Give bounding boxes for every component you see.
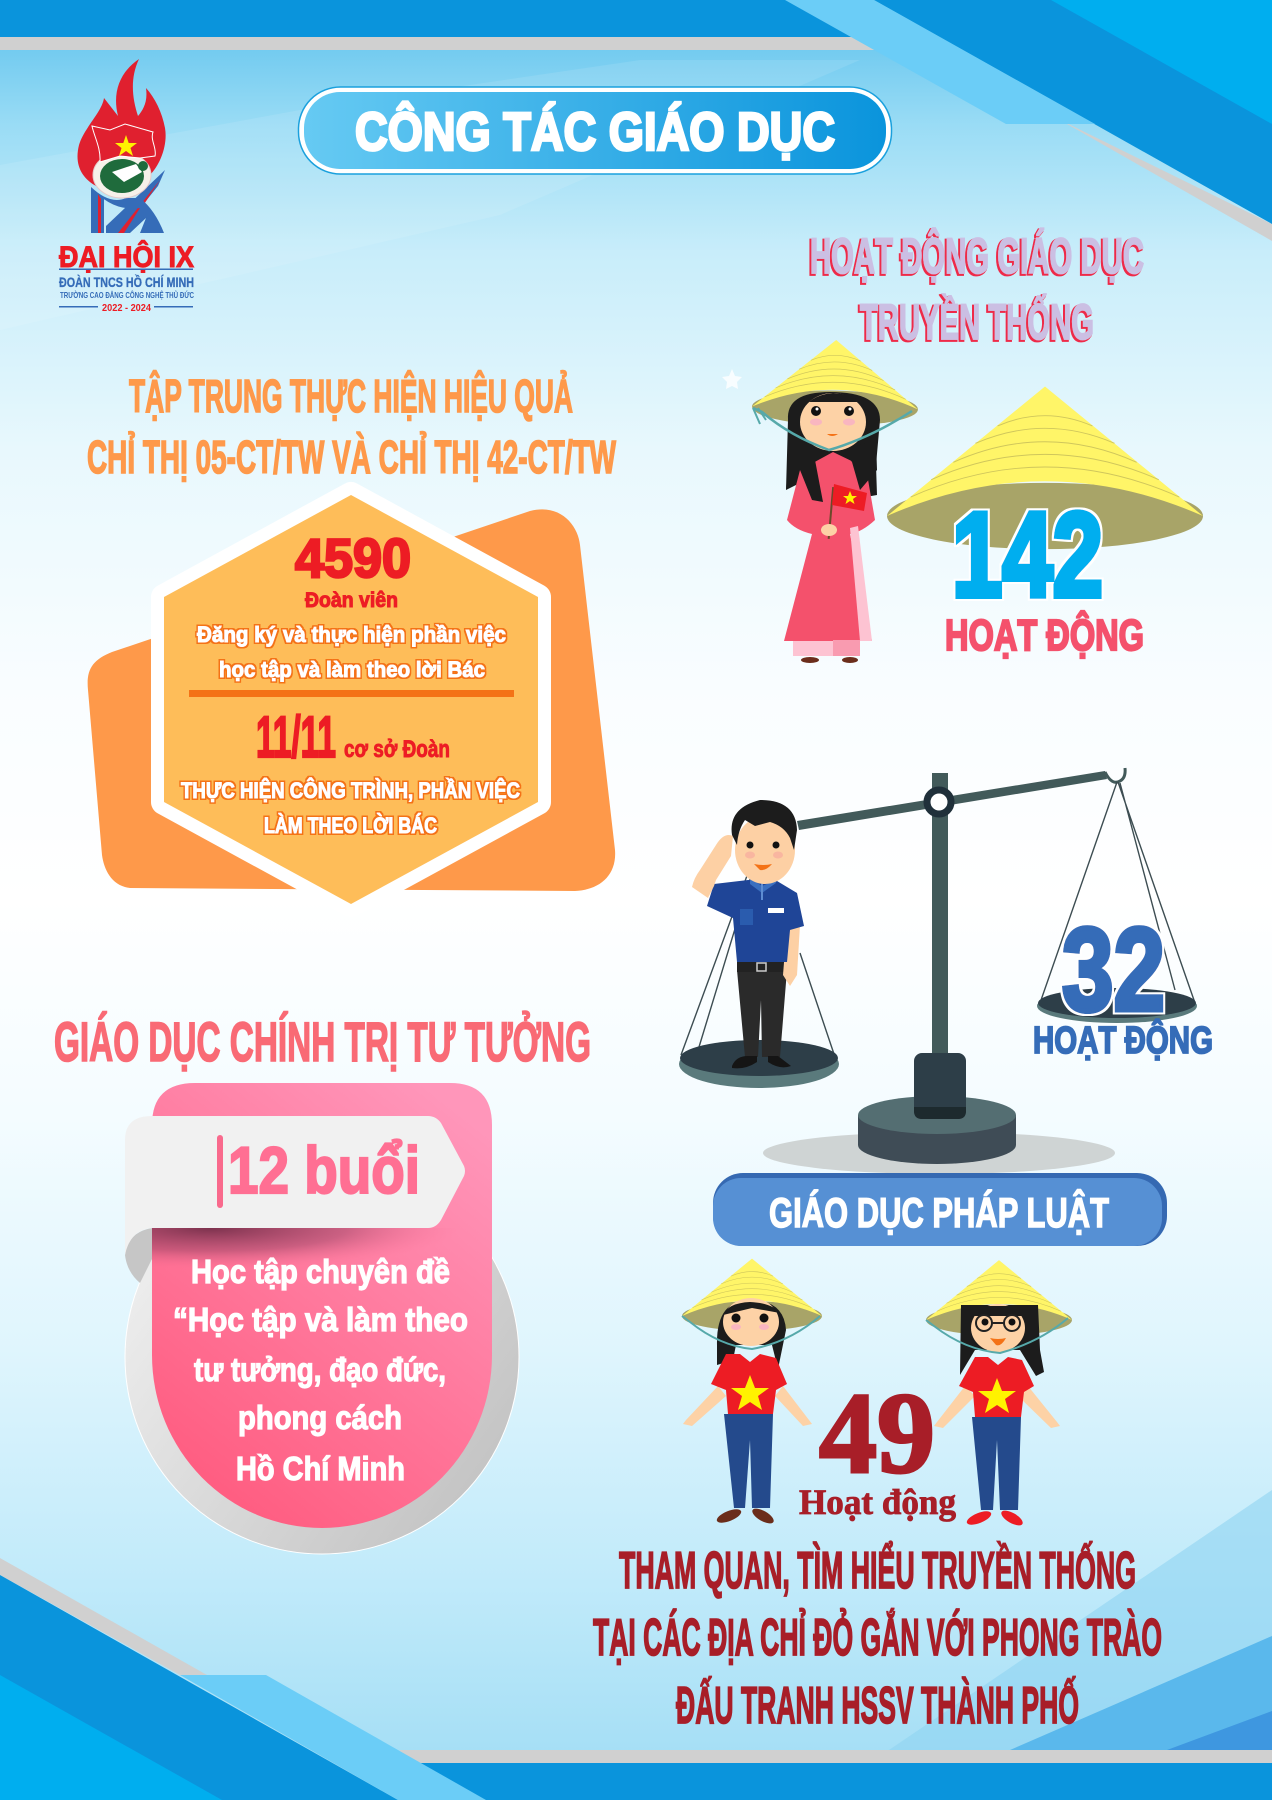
right pan <box>1037 782 1197 1023</box>
icon: emblem <box>93 152 151 198</box>
logo text: 2022 - 2024 <box>102 303 151 314</box>
logo text <box>59 240 194 314</box>
icon: large conical hat <box>887 386 1203 549</box>
icon: girl in áo dài with flag <box>722 339 919 663</box>
hexagon <box>164 495 538 904</box>
scale base <box>858 773 1016 1164</box>
heading: chỉ thị: CHỈ THỊ 05-CT/TW VÀ CHỈ THỊ 42-CT/TW <box>87 431 616 483</box>
badge text <box>173 1253 468 1487</box>
title pill <box>298 87 892 174</box>
text: registered <box>197 622 506 682</box>
text: registered: học tập và làm theo lời Bác <box>219 657 485 682</box>
label: Đoàn viên: Đoàn viên <box>305 589 398 612</box>
logo: Đại hội IX <box>59 59 194 314</box>
bottom-left corner bands <box>0 1558 1272 1800</box>
logo text: TRƯỜNG CAO ĐẲNG CÔNG NGHỆ THỦ ĐỨC <box>60 289 194 300</box>
badge text: “Học tập và làm theo <box>173 1301 468 1338</box>
scale beam <box>797 768 1125 830</box>
stat: 142 hoạt động: 142 <box>952 488 1103 622</box>
icon: flame <box>78 59 166 186</box>
stat: 32 hoạt động: 32 <box>1062 904 1165 1036</box>
badge text: tư tưởng, đạo đức, <box>194 1351 446 1388</box>
top-right corner bands <box>0 0 1272 241</box>
heading: hoạt động giáo dục truyền thống <box>810 227 1144 350</box>
stat: 49 hoạt động: 49 <box>819 1370 935 1498</box>
text: registered: Đăng ký và thực hiện phần việc <box>197 622 506 647</box>
heading: giáo dục chính trị tư tưởng: GIÁO DỤC CHÍNH TRỊ TƯ TƯỞNG <box>54 1010 591 1073</box>
badge text: Hồ Chí Minh <box>236 1450 405 1487</box>
heading: chỉ thị <box>87 370 616 483</box>
chart: balance scale <box>679 768 1197 1174</box>
stat: 12 buổi: 12 buổi <box>228 1133 420 1207</box>
orange backing shape <box>88 509 615 891</box>
icon: IX mark <box>91 170 165 233</box>
panel: 12 buổi badge <box>125 1083 519 1554</box>
button: giáo dục pháp luật: GIÁO DỤC PHÁP LUẬT <box>769 1188 1109 1236</box>
stat: 49 hoạt động <box>799 1370 956 1522</box>
heading: hoạt động giáo dục truyền thống: TRUYỀN THỐNG <box>860 293 1094 350</box>
text: works <box>181 778 520 838</box>
stat: 4590: 4590 <box>295 527 411 589</box>
stat: 32 hoạt động <box>1033 904 1213 1062</box>
logo text: ĐOÀN TNCS HỒ CHÍ MINH <box>59 273 194 290</box>
stat: 32 hoạt động: HOẠT ĐỘNG <box>1033 1017 1213 1062</box>
heading: chỉ thị: TẬP TRUNG THỰC HIỆN HIỆU QUẢ <box>129 370 573 422</box>
icon: girl with glasses and red shoes <box>926 1260 1072 1528</box>
left pan <box>679 873 839 1088</box>
stat: 11/11: 11/11 <box>256 705 336 770</box>
button: giáo dục pháp luật <box>713 1173 1167 1246</box>
stat: 142 hoạt động: HOẠT ĐỘNG <box>945 609 1144 660</box>
icon: saluting young man <box>692 800 804 1068</box>
text: works: LÀM THEO LỜI BÁC <box>264 813 437 838</box>
logo text: ĐẠI HỘI IX <box>59 240 194 274</box>
badge text: Học tập chuyên đề <box>191 1253 450 1290</box>
title text: CÔNG TÁC GIÁO DỤC <box>355 101 835 162</box>
panel: hexagon stats <box>88 495 615 904</box>
stat: 11/11: cơ sở Đoàn <box>344 736 450 763</box>
icon: flag <box>92 124 155 162</box>
badge text: phong cách <box>238 1399 402 1436</box>
icon: girl with brown shoes <box>682 1259 822 1526</box>
text: works: THỰC HIỆN CÔNG TRÌNH, PHẦN VIỆC <box>181 778 520 803</box>
text: tham quan tìm hiểu truyền thống <box>593 1541 1162 1735</box>
stat: 49 hoạt động: Hoạt động <box>799 1482 956 1522</box>
